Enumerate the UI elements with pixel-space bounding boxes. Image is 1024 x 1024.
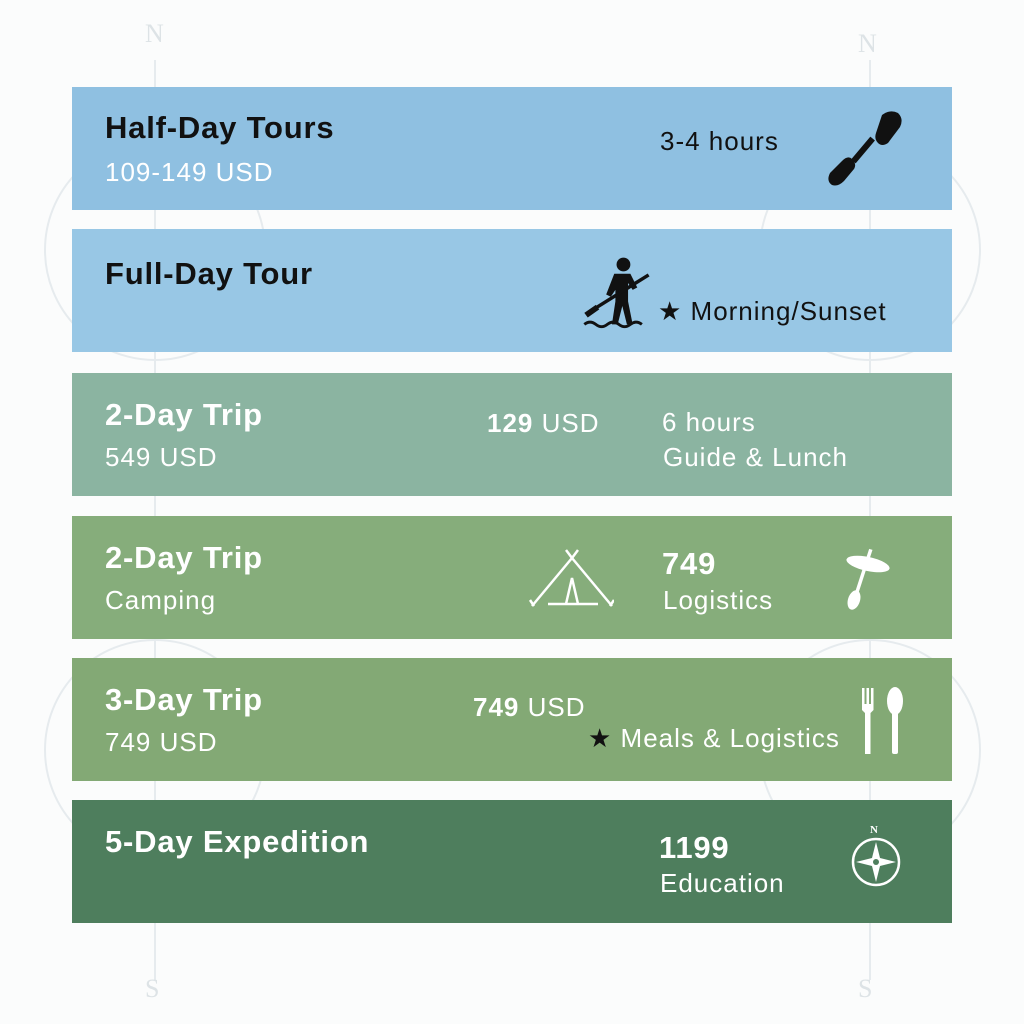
- title: 2-Day Trip: [105, 540, 263, 575]
- price: 1199: 1199: [659, 830, 729, 865]
- price: 129 USD: 129 USD: [487, 408, 600, 438]
- panel: 2-day trip 549: [72, 373, 952, 496]
- inclusion: education: Education: [660, 868, 785, 898]
- panel: 3-day trip: [72, 658, 952, 781]
- icon: tent: [529, 549, 614, 607]
- inclusion: logistics: Logistics: [663, 585, 773, 615]
- price: 749 USD: [105, 727, 218, 757]
- panel: 2-day trip camping: [72, 516, 952, 639]
- title: full-day tour: Full-Day Tour: [105, 256, 313, 291]
- icon: compass: [852, 824, 900, 886]
- note: meals & logistics: ★ Meals & Logistics: [588, 723, 840, 753]
- price: 749 USD: 749 USD: [473, 692, 586, 722]
- price: 749: 749: [662, 546, 716, 581]
- panel: 5-day expedition: [72, 800, 952, 923]
- panel: half-day tours: [72, 87, 952, 210]
- title: 3-Day Trip: [105, 682, 263, 717]
- background compass decorations: N: [145, 19, 164, 48]
- title: 5-Day Expedition: [105, 824, 369, 859]
- panel: full-day tour: [72, 229, 952, 352]
- background compass decorations: N: [858, 29, 877, 58]
- duration: 3-4 hours: [660, 126, 779, 156]
- note: morning/sunset: ★ Morning/Sunset: [658, 296, 887, 326]
- background compass decorations: S: [145, 974, 159, 1003]
- background compass decorations: S: [858, 974, 872, 1003]
- icon: canoe and paddle: [846, 548, 890, 610]
- subtitle: camping: Camping: [105, 585, 216, 615]
- icon: fork and spoon: [862, 687, 903, 754]
- price: 549 USD: [105, 442, 218, 472]
- duration and inclusions: 6 hours: [662, 407, 756, 437]
- price: 109-149 USD: [105, 157, 274, 187]
- panel: 2-day trip 549: Guide & Lunch: [663, 442, 848, 472]
- icon: paddle: [828, 111, 902, 186]
- icon: compass: N: [870, 824, 878, 836]
- title: 2-Day Trip: [105, 397, 263, 432]
- title: half-day tours: Half-Day Tours: [105, 110, 334, 145]
- icon: paddleboarder: [584, 258, 650, 328]
